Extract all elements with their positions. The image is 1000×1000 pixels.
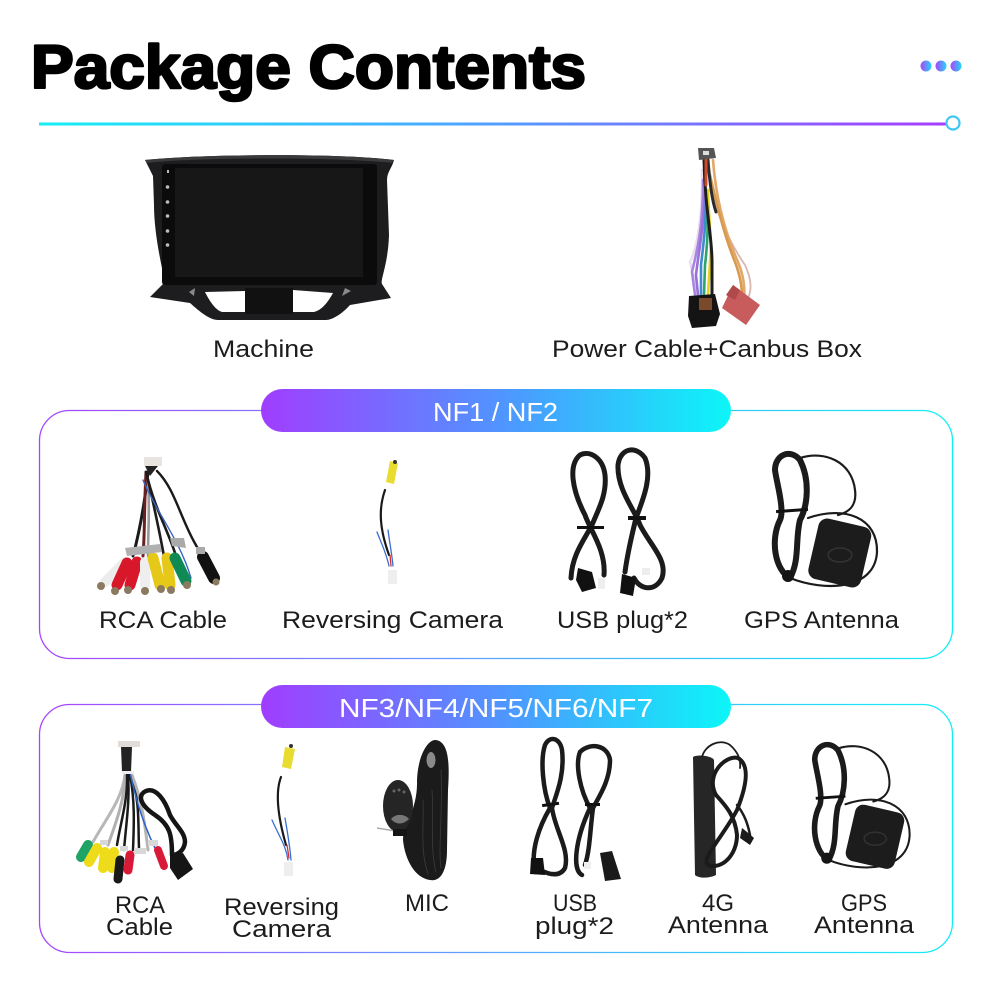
label: RCA cable: Cable [106,914,173,941]
panel frame [40,704,952,952]
heading pill: NF3/NF4/NF5/NF6/NF7 [261,685,731,728]
label: RCA cable: RCA [115,892,165,919]
item: reversing camera [224,744,339,943]
label: 4G antenna: Antenna [668,912,769,939]
icon: GPS antenna [775,454,877,589]
item: GPS antenna [744,454,900,634]
panel: NF1 / NF2 [40,389,952,658]
label: machine: Machine [213,336,314,363]
label: USB plug x2: plug*2 [535,913,614,940]
icon: camera cable [272,744,295,876]
label: USB plug x2 [535,890,614,940]
label: reversing camera: Reversing [224,894,339,921]
label: 4G antenna: 4G [702,890,734,917]
label: GPS antenna: GPS Antenna [744,607,900,634]
label: RCA cable [106,892,173,941]
label: GPS antenna: Antenna [814,912,915,939]
heading pill: NF3/NF4/NF5/NF6/NF7: NF3/NF4/NF5/NF6/NF7 [339,693,653,723]
icon: RCA cable with USB [81,741,193,880]
label: GPS antenna: GPS [841,890,887,917]
panel frame [40,410,952,658]
label: USB plug x2: USB plug*2 [557,607,688,634]
item: RCA cable [97,457,227,634]
item: USB plug x2 [530,739,621,940]
label: GPS antenna [814,890,915,939]
item: MIC [377,740,449,917]
label: USB plug x2: USB [553,890,597,917]
item: reversing camera [282,460,504,634]
heading pill: NF1 / NF2 [261,389,731,432]
icon: microphone [377,740,449,880]
panel: NF3 to NF7 [40,685,952,952]
label: power cable: Power Cable+Canbus Box [552,336,862,363]
icon: head unit [145,155,394,320]
icon: three dots [920,60,962,72]
icon: wiring harness [688,148,760,328]
label: RCA cable: RCA Cable [99,607,227,634]
icon: GPS antenna [815,745,910,871]
label: reversing camera: Camera [232,916,332,943]
title: Package Contents [31,33,586,101]
item: 4G antenna [668,742,769,939]
icon: USB cables [571,450,663,596]
item: USB plug x2 [557,450,688,634]
label: reversing camera: Reversing Camera [282,607,504,634]
icon: RCA cable [97,457,220,595]
icon: USB cables [530,739,621,881]
item: GPS antenna [814,745,915,939]
label: MIC: MIC [405,890,449,917]
heading pill: NF1 / NF2: NF1 / NF2 [433,397,558,427]
label: 4G antenna [668,890,769,939]
header divider line [39,116,960,130]
icon: 4G antenna [693,742,754,878]
item: power cable and canbus box [552,148,862,363]
label: reversing camera [224,894,339,943]
item: RCA cable [81,741,193,941]
item: machine [145,155,394,363]
icon: camera cable [377,460,398,584]
